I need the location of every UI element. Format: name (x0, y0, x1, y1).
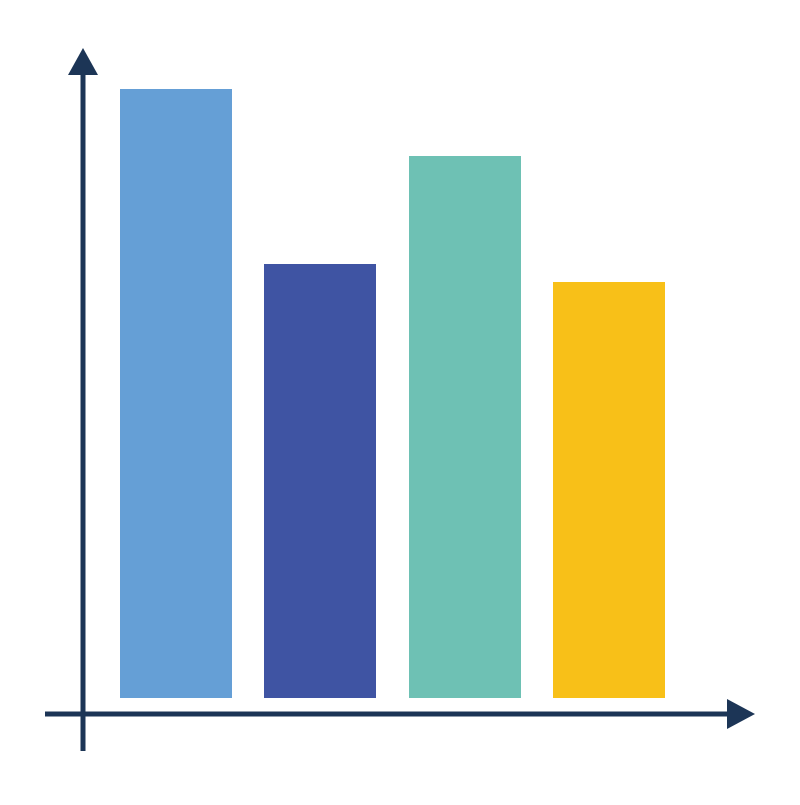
bar 2: dark blue (264, 264, 376, 698)
bar 4: yellow (553, 282, 665, 698)
y axis with arrow (68, 48, 98, 751)
bar 1: light blue (120, 89, 232, 698)
x axis with arrow (45, 699, 755, 729)
bar 3: teal (409, 156, 521, 698)
